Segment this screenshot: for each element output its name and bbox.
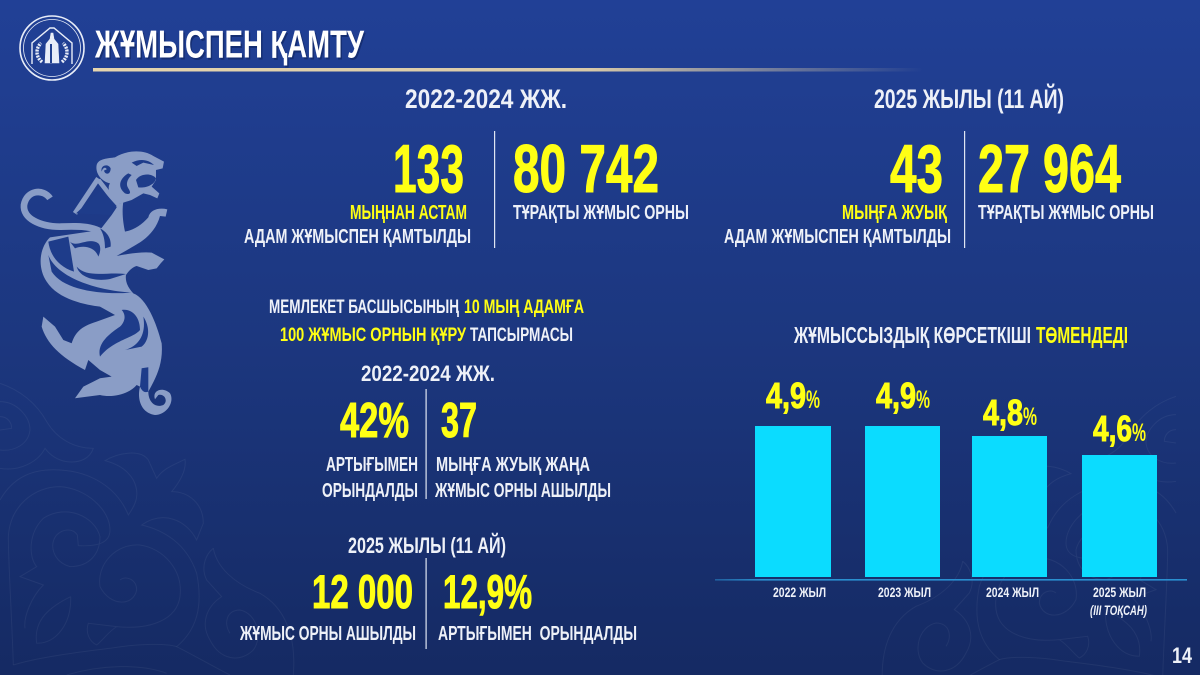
axis label 2022: 2022 ЖЫЛ xyxy=(773,584,826,600)
chart heading: ТӨМЕНДЕДІ xyxy=(1036,322,1128,348)
label: people employed: АДАМ ЖҰМЫСПЕН ҚАМТЫЛДЫ xyxy=(724,226,951,248)
number: 42%: 42% xyxy=(340,394,409,448)
icon: snow leopard xyxy=(24,151,171,415)
big number: 27 964: 27 964 xyxy=(978,131,1121,207)
number: 12,9%: 12,9% xyxy=(443,565,532,618)
title xyxy=(94,24,366,68)
axis label 2024: 2024 ЖЫЛ xyxy=(986,584,1039,600)
icon: round emblem xyxy=(20,16,84,80)
title underline xyxy=(93,68,923,72)
divider xyxy=(494,131,495,248)
heading: 2025 ЖЫЛЫ (11 АЙ) xyxy=(874,83,1064,114)
big number: 43: 43 xyxy=(890,131,943,207)
panel: 2022-2024 totals xyxy=(244,84,689,248)
label: yellow: МЫҢҒА ЖУЫҚ xyxy=(842,202,948,224)
ornament: right corner xyxy=(882,396,1176,675)
value 2022: % xyxy=(806,386,820,414)
label: people employed: АДАМ ЖҰМЫСПЕН ҚАМТЫЛДЫ xyxy=(244,226,471,248)
number: 12 000: 12 000 xyxy=(312,565,413,618)
task heading line 2: 100 ЖҰМЫС ОРНЫН ҚҰРУ xyxy=(280,325,466,346)
value 2025: 4,6 xyxy=(1093,408,1132,449)
panel: head of state task xyxy=(239,297,637,649)
task heading line 1: МЕМЛЕКЕТ БАСШЫСЫНЫҢ xyxy=(269,297,459,318)
divider xyxy=(426,558,427,649)
task heading line 2: ТАПСЫРМАСЫ xyxy=(470,325,573,346)
value 2022: 4,9 xyxy=(766,375,806,416)
big number: 80 742: 80 742 xyxy=(513,131,659,207)
subheading 2022-2024: 2022-2024 ЖЖ. xyxy=(361,361,495,386)
task heading line 1: 10 МЫҢ АДАМҒА xyxy=(464,297,584,318)
panel: unemployment chart xyxy=(715,322,1187,618)
value 2023: 4,9 xyxy=(876,375,916,416)
title: ЖҰМЫСПЕН ҚАМТУ xyxy=(96,26,366,68)
axis line xyxy=(715,579,1187,581)
value 2024: 4,8 xyxy=(983,392,1023,433)
label: overfulfilled: ОРЫНДАЛДЫ xyxy=(322,480,418,502)
subheading 2025: 2025 ЖЫЛЫ (11 АЙ) xyxy=(348,533,506,558)
label: overfulfilled: АРТЫҒЫМЕН ОРЫНДАЛДЫ xyxy=(438,623,637,645)
label: permanent jobs: ТҰРАҚТЫ ЖҰМЫС ОРНЫ xyxy=(513,202,689,224)
value 2023: % xyxy=(916,386,930,414)
label: new jobs xyxy=(434,454,611,502)
label: yellow: МЫҢНАН АСТАМ xyxy=(350,202,467,224)
heading: 2022-2024 ЖЖ. xyxy=(405,84,567,114)
divider xyxy=(426,389,427,499)
bar chart xyxy=(755,426,1157,577)
label: overfulfilled: АРТЫҒЫМЕН xyxy=(326,454,418,476)
label: new jobs: МЫҢҒА ЖУЫҚ ЖАҢА xyxy=(436,454,590,476)
divider xyxy=(964,131,965,248)
ornament: left corner xyxy=(0,383,294,675)
label: new jobs: ЖҰМЫС ОРНЫ АШЫЛДЫ xyxy=(434,480,611,502)
number: 37: 37 xyxy=(441,394,477,448)
label: jobs opened: ЖҰМЫС ОРНЫ АШЫЛДЫ xyxy=(239,623,416,645)
label: overfulfilled xyxy=(322,454,418,502)
page number: 14 xyxy=(1172,643,1193,668)
value 2024: % xyxy=(1023,403,1037,431)
big number: 133: 133 xyxy=(393,131,464,207)
panel: 2025 totals xyxy=(724,83,1154,248)
value 2025: % xyxy=(1132,419,1146,447)
axis label 2023: 2023 ЖЫЛ xyxy=(878,584,931,600)
axis label 2025: 2025 ЖЫЛ xyxy=(1093,584,1146,600)
axis note: (ІІІ ТОҚСАН) xyxy=(1090,602,1147,618)
title: ЖҰМЫСПЕН ҚАМТУ xyxy=(94,24,365,66)
chart heading: ЖҰМЫССЫЗДЫҚ КӨРСЕТКІШІ xyxy=(793,322,1031,348)
